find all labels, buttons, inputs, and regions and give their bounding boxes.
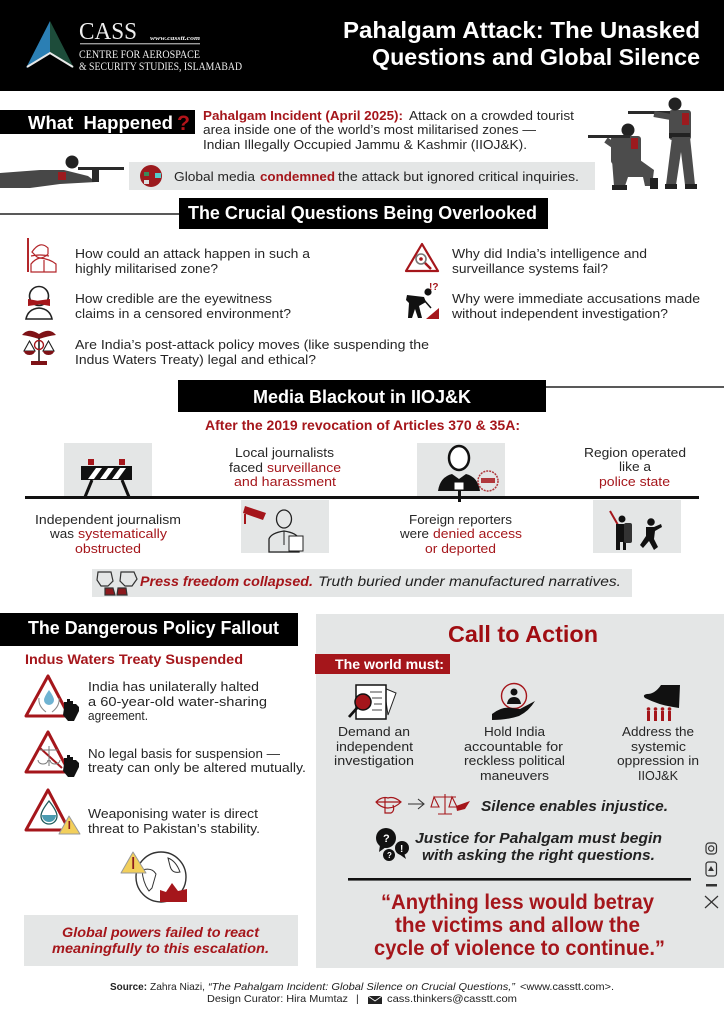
- footer: source: Zahra Niazi,: [150, 981, 205, 993]
- footer: source: “The Pahalgam Incident: Global Silence on Crucial Questions,”: [208, 981, 516, 993]
- question 3: Indus Waters Treaty) legal and ethical?: [75, 352, 316, 367]
- icon: question bubbles: ?: [387, 851, 392, 860]
- action: address oppression: oppression in: [617, 753, 699, 768]
- action: address oppression: Address the: [622, 724, 694, 739]
- footer: source: [110, 981, 614, 1005]
- point 1: [88, 679, 267, 723]
- footer: source: cass.thinkers@casstt.com: [387, 993, 517, 1005]
- action: demand investigation: independent: [336, 739, 413, 754]
- icon: barrier: [64, 443, 152, 497]
- text: region operated: police state: [599, 474, 670, 489]
- icon: soldier: [28, 238, 56, 272]
- footer: source: |: [356, 993, 359, 1005]
- question 3: Are India’s post-attack policy moves (like suspending the: [75, 337, 429, 352]
- point 2: [88, 746, 306, 775]
- logo: CASS triangle: [26, 21, 74, 68]
- illustration: prone soldier: [0, 156, 124, 188]
- question 5: without independent investigation?: [451, 306, 668, 321]
- text: independent journalism: systematically: [78, 526, 168, 541]
- callout: press freedom: Press freedom collapsed.: [140, 573, 313, 589]
- action: hold India accountable: accountable for: [464, 739, 564, 754]
- header band: [0, 0, 724, 91]
- question 5: [451, 291, 700, 321]
- callout: global powers: meaningfully to this escalation.: [52, 940, 269, 956]
- text: region operated: like a: [619, 459, 652, 474]
- icon: question bubbles: [376, 828, 409, 861]
- icon: man with question marks: [406, 282, 439, 319]
- question 2: [75, 291, 291, 321]
- logo wordmark: CASS: [79, 19, 137, 45]
- question 2: claims in a censored environment?: [75, 306, 291, 321]
- quote: “Anything less would betray: [381, 891, 654, 914]
- icon: chained fists: [97, 572, 137, 595]
- heading: What Happened: [0, 110, 195, 135]
- action: hold India accountable: [464, 724, 565, 783]
- heading: call to action: Call to Action: [448, 621, 598, 647]
- quote: [374, 891, 665, 960]
- text: foreign reporters: were: [399, 526, 429, 541]
- icon: envelope: [368, 996, 382, 1004]
- text: foreign reporters: or deported: [425, 541, 496, 556]
- text: foreign reporters: Foreign reporters: [409, 512, 513, 527]
- text: independent journalism: [35, 512, 181, 556]
- footer: source: Design Curator: Hira Mumtaz: [207, 993, 348, 1005]
- text: region operated: Region operated: [584, 445, 686, 460]
- point 2: No legal basis for suspension —: [88, 746, 280, 761]
- action: address oppression: [617, 724, 699, 783]
- text: local journalists: surveillance: [267, 460, 341, 475]
- section: What Happened: [0, 98, 697, 190]
- divider: timeline: [25, 496, 699, 499]
- question 5: Why were immediate accusations made: [452, 291, 700, 306]
- action: demand investigation: investigation: [334, 753, 414, 768]
- action: address oppression: IIOJ&K: [638, 768, 678, 783]
- question 2: How credible are the eyewitness: [75, 291, 273, 306]
- heading: media blackout: [178, 380, 546, 412]
- action: demand investigation: [334, 724, 414, 768]
- label: the world must: The world must:: [335, 656, 444, 672]
- question 3: [75, 337, 429, 367]
- text: foreign reporters: denied access: [433, 526, 523, 541]
- action: demand investigation: Demand an: [338, 724, 410, 739]
- subheading: indus waters: Indus Waters Treaty Suspended: [25, 651, 243, 667]
- callout: global media: the attack but ignored critical inquiries.: [338, 169, 579, 184]
- incident text: area inside one of the world’s most militarised zones —: [203, 122, 536, 137]
- social icons: [705, 843, 718, 908]
- text: independent journalism: obstructed: [75, 541, 141, 556]
- text: local journalists: faced: [229, 460, 263, 475]
- question 1: [75, 246, 311, 276]
- point 3: [88, 806, 260, 836]
- title: [343, 17, 700, 70]
- point 1: agreement.: [88, 708, 148, 723]
- callout: press freedom: Truth buried under manufactured narratives.: [318, 573, 621, 589]
- point 3: threat to Pakistan’s stability.: [88, 821, 260, 836]
- question 1: How could an attack happen in such a: [75, 246, 311, 261]
- icon: hand holding person: [492, 684, 535, 720]
- title: Pahalgam Attack: The Unasked: [343, 17, 700, 43]
- text: silence enables injustice: Silence enables injustice.: [481, 798, 668, 815]
- text: justice for Pahalgam: with asking the right questions.: [422, 847, 655, 864]
- icon: boot over people: [644, 685, 680, 721]
- quote: cycle of violence to continue.”: [374, 937, 665, 960]
- heading: What Happened: What Happened: [28, 113, 173, 133]
- action: hold India accountable: reckless political: [464, 753, 565, 768]
- title: Questions and Global Silence: [372, 44, 700, 70]
- action: hold India accountable: Hold India: [484, 724, 546, 739]
- heading: crucial questions: The Crucial Questions Being Overlooked: [188, 203, 537, 223]
- icon: globe with warning: [121, 852, 187, 902]
- icon: scales of justice: [22, 331, 56, 365]
- callout: global powers: [24, 915, 298, 966]
- logo wordmark: [79, 19, 242, 73]
- point 2: treaty can only be altered mutually.: [88, 760, 306, 775]
- icon: censored witness: [26, 286, 52, 319]
- heading: media blackout: Media Blackout in IIOJ&K: [253, 387, 471, 407]
- icon: water drop warning: [26, 790, 80, 834]
- footer: source: <www.casstt.com>.: [520, 981, 614, 993]
- incident text: [203, 108, 574, 152]
- text: justice for Pahalgam: Justice for Pahalgam must begin: [415, 830, 662, 847]
- icon: man with question marks: !?: [429, 282, 438, 293]
- action: hold India accountable: maneuvers: [480, 768, 550, 783]
- callout: press freedom: [92, 569, 632, 597]
- icon: surveillance: [241, 500, 329, 553]
- text: local journalists: [229, 445, 341, 489]
- icon: water warning with hand: [26, 676, 79, 721]
- action: address oppression: systemic: [631, 739, 687, 754]
- text: justice for Pahalgam: [415, 830, 662, 864]
- label: the world must: [315, 654, 450, 674]
- quote: the victims and allow the: [395, 914, 640, 937]
- callout: global media: condemned: [260, 169, 335, 184]
- panel: call to action: [315, 614, 724, 968]
- heading: crucial questions: [179, 198, 548, 229]
- section: Crucial Questions: [0, 198, 700, 367]
- text: local journalists: Local journalists: [235, 445, 335, 460]
- logo wordmark: CENTRE FOR AEROSPACE: [79, 49, 200, 61]
- icon: silenced lips: [376, 798, 401, 813]
- text: foreign reporters: [399, 512, 523, 556]
- section: Media Blackout: [25, 380, 724, 597]
- incident text: Indian Illegally Occupied Jammu & Kashmir (IIOJ&K).: [203, 137, 527, 152]
- icon: globe with mute: [140, 165, 162, 187]
- logo wordmark: www.casstt.com: [150, 35, 200, 42]
- text: region operated: [584, 445, 686, 489]
- icon: question bubbles: ?: [383, 833, 390, 845]
- text: independent journalism: was: [49, 526, 75, 541]
- illustration: standing and kneeling soldiers: [588, 98, 697, 190]
- icon: scales warning with hand: [26, 732, 79, 777]
- question 4: surveillance systems fail?: [452, 261, 608, 276]
- incident text: Attack on a crowded tourist: [409, 108, 574, 123]
- question 4: Why did India’s intelligence and: [452, 246, 647, 261]
- icon: journalist: [417, 443, 505, 502]
- callout: global media: [129, 162, 595, 190]
- logo wordmark: & SECURITY STUDIES, ISLAMABAD: [79, 61, 242, 73]
- icon: question bubbles: !: [400, 844, 403, 855]
- question 4: [452, 246, 647, 276]
- point 1: India has unilaterally halted: [88, 679, 259, 694]
- heading: policy fallout: The Dangerous Policy Fallout: [28, 618, 279, 638]
- arrow: [408, 799, 424, 809]
- footer: source: Source:: [110, 981, 147, 993]
- icon: riot police: [593, 500, 681, 553]
- incident text: Pahalgam Incident (April 2025):: [203, 108, 403, 123]
- icon: broken scales: [431, 794, 470, 814]
- icon: warning magnifier: [406, 244, 438, 271]
- heading: policy fallout: [0, 613, 298, 646]
- text: local journalists: and harassment: [234, 474, 336, 489]
- question 1: highly militarised zone?: [75, 261, 218, 276]
- panel: policy fallout: [0, 613, 306, 966]
- subheading: After the 2019 revocation of Articles 370 & 35A:: [205, 417, 520, 433]
- point 1: a 60-year-old water-sharing: [88, 694, 267, 709]
- text: independent journalism: Independent journalism: [35, 512, 181, 527]
- icon: document magnifier: [349, 685, 396, 719]
- callout: global media: Global media: [174, 169, 256, 184]
- point 3: Weaponising water is direct: [88, 806, 258, 821]
- callout: global powers: Global powers failed to react: [62, 924, 260, 940]
- heading: What Happened: ?: [177, 112, 190, 135]
